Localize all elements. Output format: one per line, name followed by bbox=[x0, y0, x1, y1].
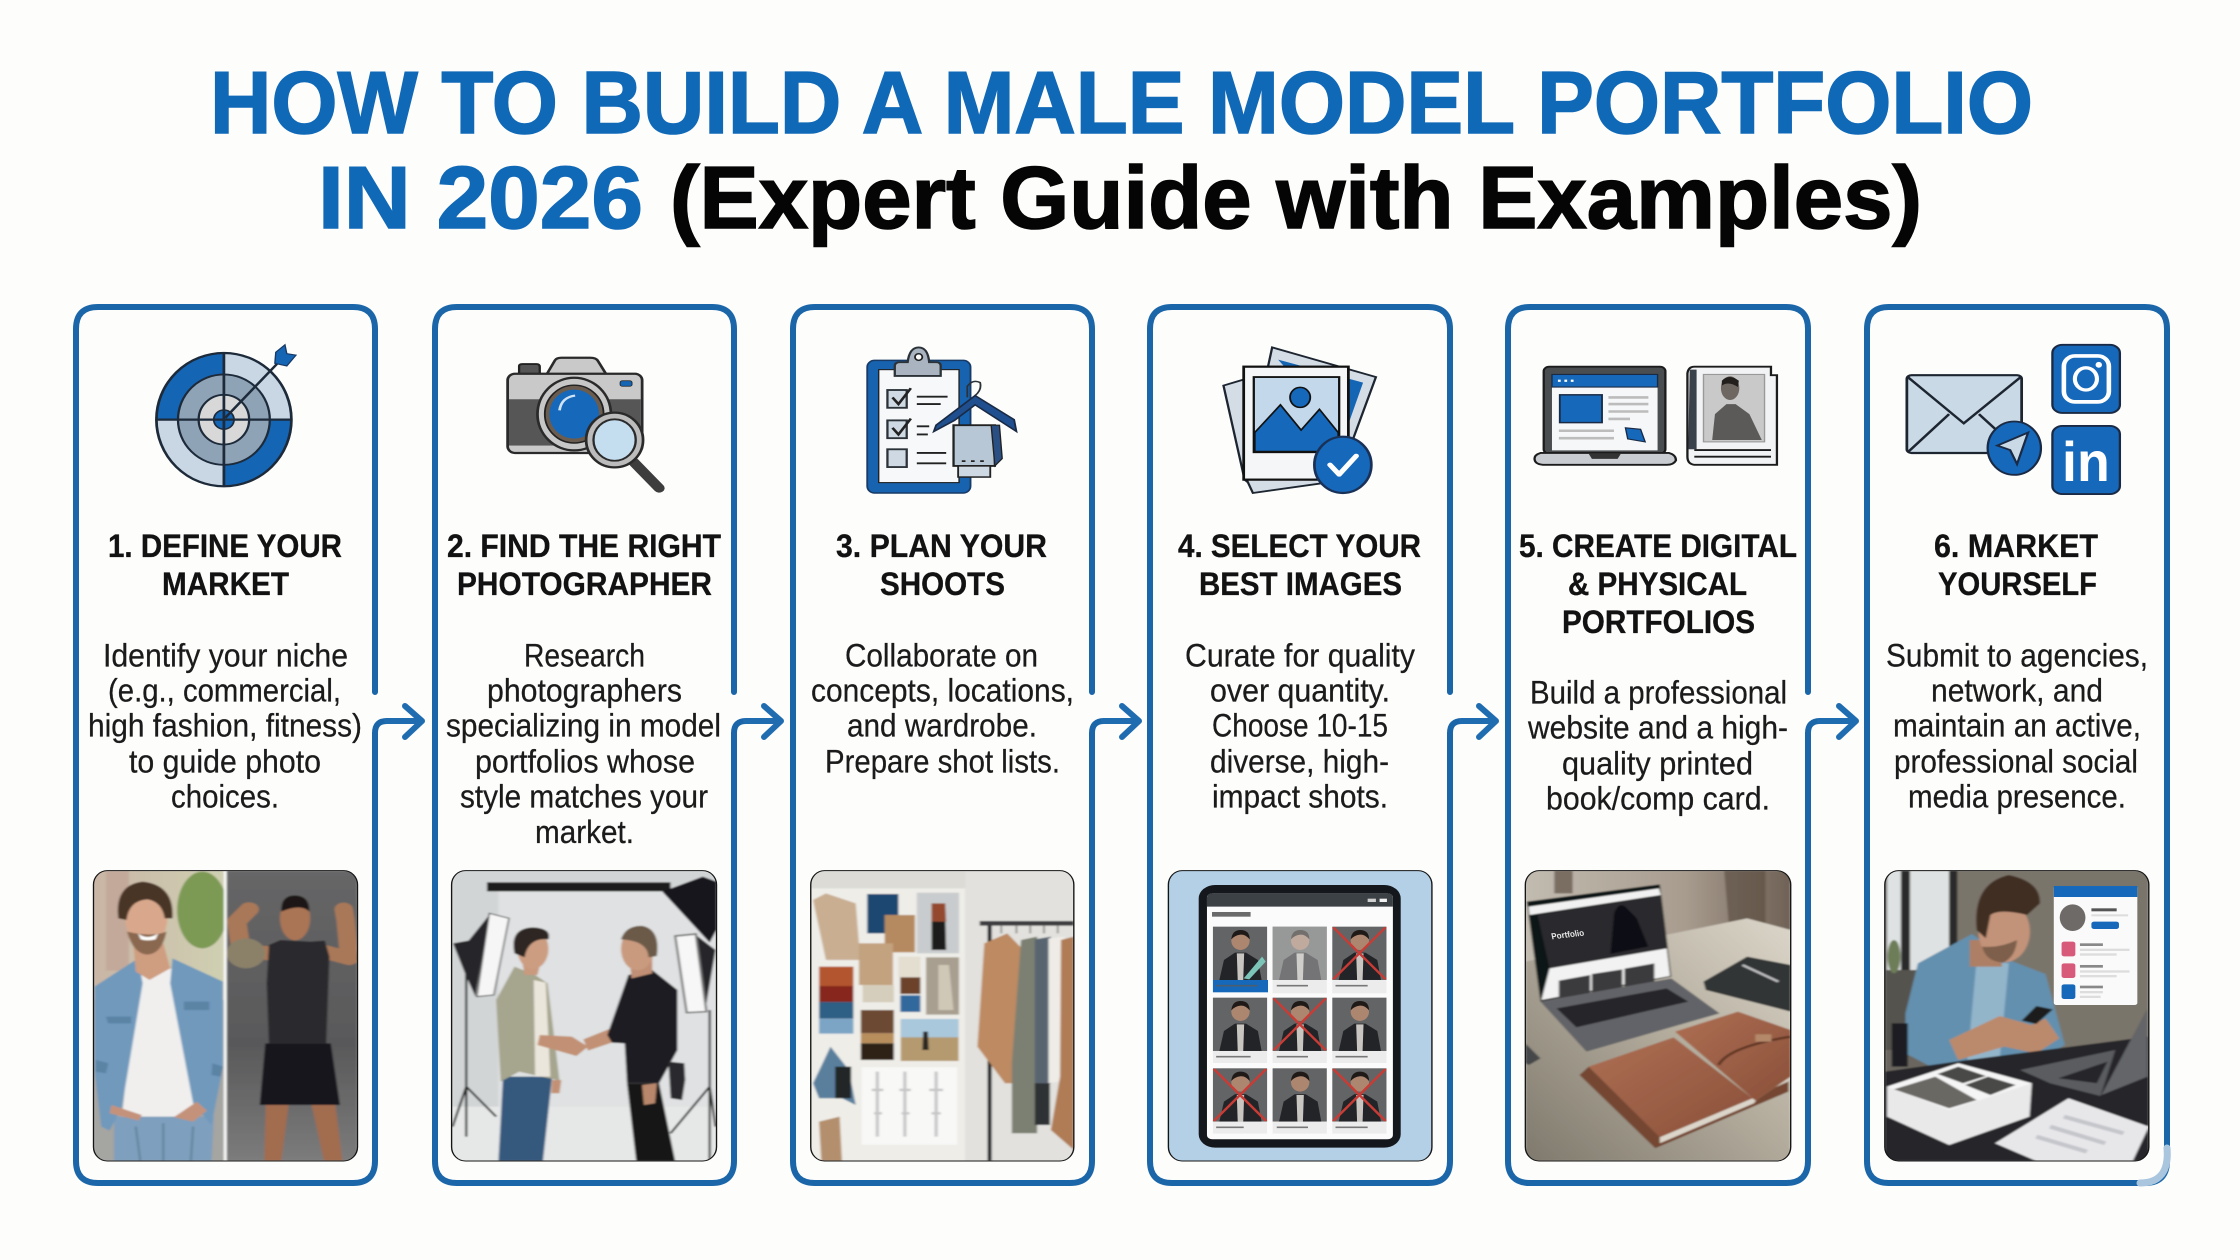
icon: camera with magnifier bbox=[508, 358, 659, 488]
body text: step 2: specializing in model bbox=[446, 708, 721, 744]
heading: step 3: SHOOTS bbox=[880, 566, 1005, 602]
title: (Expert Guide with Examples) bbox=[670, 148, 1922, 247]
heading: step 6: YOURSELF bbox=[1938, 566, 2097, 602]
icon: envelope and social media badges bbox=[1907, 345, 2120, 494]
heading: step 2: PHOTOGRAPHER bbox=[457, 566, 712, 602]
panel: step 3 plan your shoots bbox=[793, 307, 1139, 1183]
body text: step 4: Choose 10-15 bbox=[1212, 708, 1388, 744]
panel: step 4 select your best images bbox=[1150, 307, 1496, 1183]
body text: step 3: Collaborate on bbox=[845, 638, 1038, 674]
body text: step 2: style matches your bbox=[460, 778, 708, 814]
panel: step 2 find the right photographer bbox=[435, 307, 781, 1183]
icon: envelope and social media badges: in bbox=[2062, 431, 2110, 494]
panel: step 6 market yourself bbox=[1867, 307, 2167, 1183]
heading: step 6: 6. MARKET bbox=[1934, 528, 2098, 564]
heading: step 5 bbox=[1519, 528, 1797, 640]
body text: step 4: diverse, high- bbox=[1210, 744, 1389, 780]
body text: step 1: to guide photo bbox=[129, 744, 321, 780]
body text: step 6 bbox=[1886, 638, 2148, 814]
heading: step 2 bbox=[447, 528, 721, 602]
arrow: step 4 to step 5 bbox=[1462, 706, 1496, 737]
heading: step 1 bbox=[108, 528, 342, 602]
title: IN 2026 bbox=[318, 148, 643, 247]
body text: step 1 bbox=[88, 638, 362, 814]
heading: step 3 bbox=[836, 528, 1047, 602]
photo: photographer handshake in studio bbox=[452, 871, 717, 1161]
watermark arc over card corner bbox=[2140, 1148, 2167, 1183]
heading: step 1: MARKET bbox=[162, 566, 289, 602]
body text: step 1: Identify your niche bbox=[103, 638, 348, 674]
body text: step 4 bbox=[1185, 638, 1415, 814]
body text: step 1: (e.g., commercial, bbox=[108, 672, 341, 708]
title bbox=[210, 53, 2033, 247]
photo: tablet contact sheet with rejected images bbox=[1168, 871, 1432, 1161]
arrow: step 3 to step 4 bbox=[1104, 706, 1139, 737]
icon: clipboard checklist and hanger bbox=[867, 347, 1016, 493]
heading: step 5: 5. CREATE DIGITAL bbox=[1519, 528, 1797, 564]
body text: step 3: and wardrobe. bbox=[847, 708, 1037, 744]
body text: step 5: quality printed bbox=[1562, 746, 1753, 782]
panel: step 1 define your market bbox=[76, 307, 422, 1183]
body text: step 2: Research bbox=[524, 638, 645, 674]
photo: commercial and fitness models bbox=[94, 871, 357, 1161]
body text: step 5: book/comp card. bbox=[1546, 780, 1770, 816]
body text: step 5 bbox=[1527, 674, 1788, 816]
icon: photo prints with check badge bbox=[1223, 347, 1376, 493]
body text: step 2: portfolios whose bbox=[475, 744, 695, 780]
heading: step 5: & PHYSICAL bbox=[1568, 566, 1747, 602]
heading: step 5: PORTFOLIOS bbox=[1562, 604, 1755, 640]
body text: step 3: Prepare shot lists. bbox=[825, 744, 1060, 780]
photo: model on phone with social profile card bbox=[1885, 871, 2149, 1161]
arrow: step 5 to step 6 bbox=[1820, 706, 1856, 737]
photo: moodboard and clothing rack bbox=[811, 871, 1074, 1161]
body text: step 3 bbox=[811, 638, 1074, 780]
heading: step 4: BEST IMAGES bbox=[1199, 566, 1402, 602]
body text: step 4: impact shots. bbox=[1212, 778, 1388, 814]
body text: step 6: professional social bbox=[1894, 744, 2138, 780]
title: HOW TO BUILD A MALE MODEL PORTFOLIO bbox=[210, 53, 2033, 152]
body text: step 1: choices. bbox=[171, 778, 279, 814]
heading: step 1: 1. DEFINE YOUR bbox=[108, 528, 342, 564]
body text: step 6: Submit to agencies, bbox=[1886, 638, 2148, 674]
photo: laptop website and leather portfolio book bbox=[1525, 871, 1791, 1161]
panel: step 5 create digital and physical portfolios bbox=[1508, 307, 1856, 1183]
body text: step 6: media presence. bbox=[1908, 778, 2126, 814]
body text: step 3: concepts, locations, bbox=[811, 672, 1074, 708]
body text: step 4: Curate for quality bbox=[1185, 638, 1415, 674]
body text: step 5: Build a professional bbox=[1530, 674, 1787, 710]
heading: step 4 bbox=[1178, 528, 1421, 602]
heading: step 6 bbox=[1934, 528, 2098, 602]
icon: target with arrow bbox=[156, 345, 296, 486]
heading: step 2: 2. FIND THE RIGHT bbox=[447, 528, 721, 564]
arrow: step 2 to step 3 bbox=[746, 706, 781, 737]
body text: step 2 bbox=[446, 638, 721, 850]
body text: step 2: photographers bbox=[487, 672, 682, 708]
heading: step 4: 4. SELECT YOUR bbox=[1178, 528, 1421, 564]
arrow: step 1 to step 2 bbox=[387, 706, 422, 737]
body text: step 4: over quantity. bbox=[1210, 672, 1390, 708]
body text: step 6: maintain an active, bbox=[1893, 708, 2141, 744]
laptop screen caption: Portfolio bbox=[1551, 929, 1585, 942]
body text: step 1: high fashion, fitness) bbox=[88, 708, 362, 744]
icon: laptop and printed book bbox=[1535, 367, 1777, 465]
heading: step 3: 3. PLAN YOUR bbox=[836, 528, 1047, 564]
body text: step 5: website and a high- bbox=[1527, 710, 1788, 746]
body text: step 2: market. bbox=[535, 814, 634, 850]
body text: step 6: network, and bbox=[1931, 672, 2103, 708]
